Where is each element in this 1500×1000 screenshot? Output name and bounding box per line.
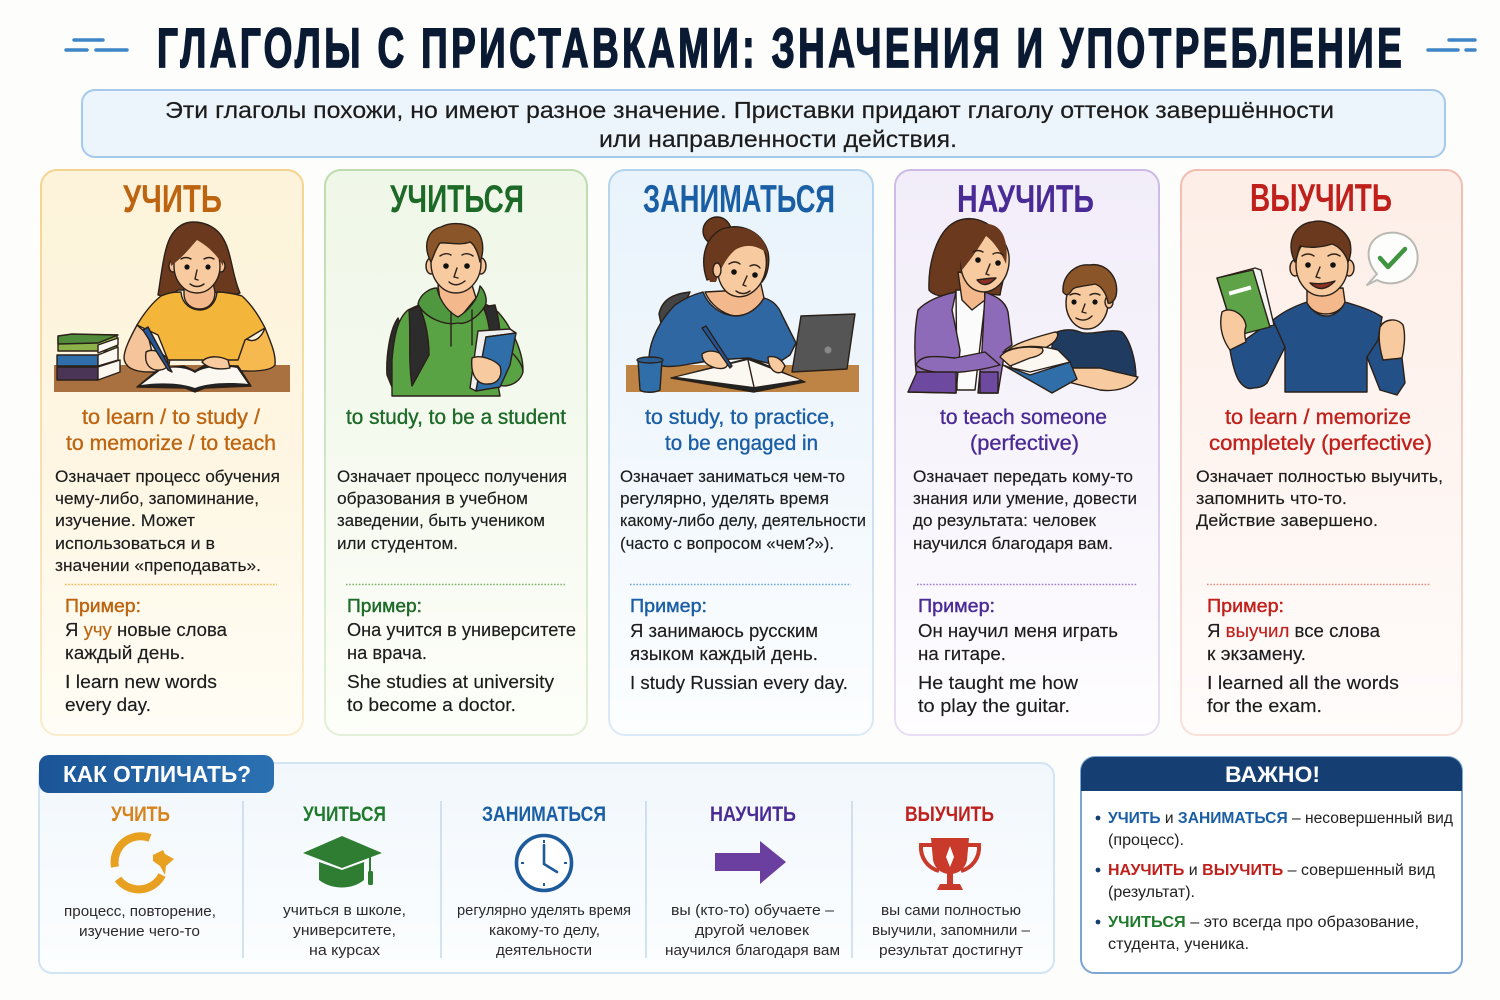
example: заниматься: I study Russian every day.: [630, 673, 848, 693]
example: научить: He taught me how: [918, 673, 1079, 693]
icon: arrow: [715, 841, 786, 884]
column: научить: НАУЧИТЬ: [710, 803, 796, 826]
column: учиться: УЧИТЬСЯ: [303, 803, 386, 826]
column: научить: другой человек: [695, 922, 809, 939]
panel: important: [1081, 757, 1462, 973]
icon: left title dashes: [66, 40, 127, 50]
definition: выучить: Означает полностью выучить,: [1196, 468, 1443, 486]
definition: учить: [55, 468, 280, 575]
definition: учить: изучение. Может: [55, 512, 195, 530]
example: учить: [65, 595, 228, 715]
example: учить: I learn new words: [65, 672, 217, 692]
translation: учить: to learn / to study /: [82, 406, 260, 429]
example: учить: Пример:: [65, 595, 141, 616]
column: научить: [665, 803, 840, 959]
definition: заниматься: (часто с вопросом «чем?»).: [620, 535, 834, 553]
definition: научить: знания или умение, довести: [913, 490, 1137, 508]
example: учиться: на врача.: [347, 643, 427, 663]
bullet: perfective: (результат).: [1108, 884, 1195, 901]
bullet: education: [1096, 914, 1419, 953]
column: заниматься: [457, 803, 631, 959]
bullet: education: УЧИТЬСЯ – это всегда про образование,: [1108, 914, 1419, 931]
example: заниматься: языком каждый день.: [630, 644, 818, 664]
bullet: perfective: НАУЧИТЬ и ВЫУЧИТЬ – совершенный вид: [1108, 862, 1435, 879]
column: заниматься: ЗАНИМАТЬСЯ: [482, 803, 606, 826]
column: учить: УЧИТЬ: [111, 803, 170, 826]
definition: заниматься: [620, 468, 866, 553]
translation: учить: [66, 406, 276, 455]
definition: учить: значении «преподавать».: [55, 557, 261, 575]
example: заниматься: Пример:: [630, 595, 707, 616]
example: учить: Я учу новые слова: [65, 620, 228, 640]
column: учиться: учиться в школе,: [283, 902, 406, 919]
heading tab: how to distinguish: [39, 755, 274, 793]
column: заниматься: регулярно уделять время: [457, 902, 631, 919]
heading: important: [1081, 757, 1462, 791]
translation: научить: [940, 406, 1107, 455]
example: учиться: She studies at university: [347, 672, 554, 692]
column: учиться: на курсах: [309, 942, 381, 959]
bullet: imperfective: [1096, 810, 1453, 849]
heading: научить: НАУЧИТЬ: [957, 178, 1094, 221]
example: учиться: to become a doctor.: [347, 695, 516, 715]
example: выучить: Пример:: [1207, 595, 1284, 616]
example: заниматься: Я занимаюсь русским: [630, 621, 818, 641]
illustration: student with backpack: [387, 224, 523, 396]
definition: учиться: заведении, быть учеником: [337, 512, 545, 530]
definition: учиться: или студентом.: [337, 535, 458, 553]
icon: right title dashes: [1428, 40, 1475, 50]
illustration: man with book and check: [1217, 221, 1418, 395]
example: научить: to play the guitar.: [918, 696, 1070, 716]
example: выучить: I learned all the words: [1207, 673, 1399, 693]
example: выучить: к экзамену.: [1207, 644, 1306, 664]
definition: научить: [913, 468, 1137, 553]
translation: заниматься: to study, to practice,: [645, 406, 835, 429]
heading: выучить: ВЫУЧИТЬ: [1250, 177, 1392, 220]
heading: заниматься: ЗАНИМАТЬСЯ: [643, 178, 835, 221]
bullet: imperfective: УЧИТЬ и ЗАНИМАТЬСЯ – несовершенный вид: [1108, 810, 1453, 827]
column: учить: процесс, повторение,: [64, 903, 216, 920]
translation: заниматься: [645, 406, 835, 455]
panel: заниматься: [609, 170, 873, 735]
column: выучить: ВЫУЧИТЬ: [905, 803, 994, 826]
definition: учить: чему-либо, запоминание,: [55, 490, 259, 508]
heading: учиться: УЧИТЬСЯ: [390, 178, 524, 221]
translation: выучить: completely (perfective): [1209, 432, 1432, 455]
panel: учить: [41, 170, 303, 735]
intro callout: или направленности действия.: [599, 126, 957, 152]
bullet: education: студента, ученика.: [1108, 936, 1249, 953]
column: учиться: университете,: [293, 922, 396, 939]
definition: учить: Означает процесс обучения: [55, 468, 280, 486]
panel: how to distinguish: [39, 755, 1054, 973]
icon: graduation cap: [303, 836, 382, 888]
definition: научить: Означает передать кому-то: [913, 468, 1133, 486]
column: выучить: [872, 803, 1031, 959]
definition: учиться: образования в учебном: [337, 490, 528, 508]
bullet: imperfective: (процесс).: [1108, 832, 1184, 849]
intro callout: Эти глаголы похожи, но имеют разное значение. Приставки придают глаголу оттенок завершённости: [165, 97, 1334, 123]
icon: clock: [516, 836, 572, 890]
translation: учить: to memorize / to teach: [66, 432, 276, 455]
definition: научить: научился благодаря вам.: [913, 535, 1113, 553]
icon: trophy: [921, 838, 979, 890]
definition: учить: использоваться и в: [55, 535, 215, 553]
translation: выучить: [1209, 406, 1432, 455]
example: учиться: [347, 595, 576, 715]
example: научить: [918, 595, 1118, 716]
illustration: woman studying with laptop: [626, 217, 859, 392]
illustration: girl writing at desk: [54, 222, 290, 392]
definition: заниматься: регулярно, уделять время: [620, 490, 829, 508]
example: учить: каждый день.: [65, 643, 185, 663]
icon: cycle: [115, 836, 174, 889]
example: учить: every day.: [65, 695, 151, 715]
column: выучить: вы сами полностью: [881, 902, 1021, 919]
panel: научить: [895, 170, 1159, 735]
definition: выучить: Действие завершено.: [1196, 512, 1378, 530]
definition: заниматься: Означает заниматься чем-то: [620, 468, 845, 486]
column: научить: научился благодаря вам: [665, 942, 840, 959]
example: научить: Он научил меня играть: [918, 621, 1118, 641]
title: ГЛАГОЛЫ С ПРИСТАВКАМИ: ЗНАЧЕНИЯ И УПОТРЕБЛЕНИЕ: [157, 17, 1402, 80]
translation: учиться: to study, to be a student: [346, 406, 566, 429]
example: научить: на гитаре.: [918, 644, 1006, 664]
example: выучить: Я выучил все слова: [1207, 621, 1381, 641]
definition: учиться: [337, 468, 567, 553]
column: заниматься: деятельности: [496, 942, 592, 959]
translation: научить: (perfective): [970, 432, 1079, 455]
translation: выучить: to learn / memorize: [1225, 406, 1411, 429]
definition: учиться: Означает процесс получения: [337, 468, 567, 486]
example: заниматься: [630, 595, 848, 693]
column: заниматься: какому-то делу,: [489, 922, 600, 939]
example: выучить: [1207, 595, 1399, 716]
column: выучить: результат достигнут: [879, 942, 1023, 959]
definition: выучить: запомнить что-то.: [1196, 490, 1347, 508]
column: учить: изучение чего-то: [79, 923, 200, 940]
translation: научить: to teach someone: [940, 406, 1107, 429]
illustration: teacher and boy with book: [908, 219, 1138, 393]
intro callout: [82, 90, 1445, 157]
example: учиться: Пример:: [347, 595, 422, 616]
panel: учиться: [325, 170, 587, 735]
column: учить: [64, 803, 216, 940]
example: выучить: for the exam.: [1207, 696, 1322, 716]
example: научить: Пример:: [918, 595, 995, 616]
heading tab: how to distinguish: КАК ОТЛИЧАТЬ?: [63, 761, 251, 787]
definition: научить: до результата: человек: [913, 512, 1097, 530]
translation: заниматься: to be engaged in: [665, 432, 818, 455]
panel: выучить: [1181, 170, 1462, 735]
column: научить: вы (кто-то) обучаете –: [671, 902, 835, 919]
column: учиться: [283, 803, 406, 959]
column: выучить: выучили, запомнили –: [872, 922, 1031, 939]
example: учиться: Она учится в университете: [347, 620, 576, 640]
definition: выучить: [1196, 468, 1443, 530]
heading: учить: УЧИТЬ: [123, 178, 222, 221]
bullet: perfective: [1096, 862, 1435, 901]
heading: important: ВАЖНО!: [1225, 762, 1320, 787]
definition: заниматься: какому-либо делу, деятельности: [620, 512, 866, 530]
